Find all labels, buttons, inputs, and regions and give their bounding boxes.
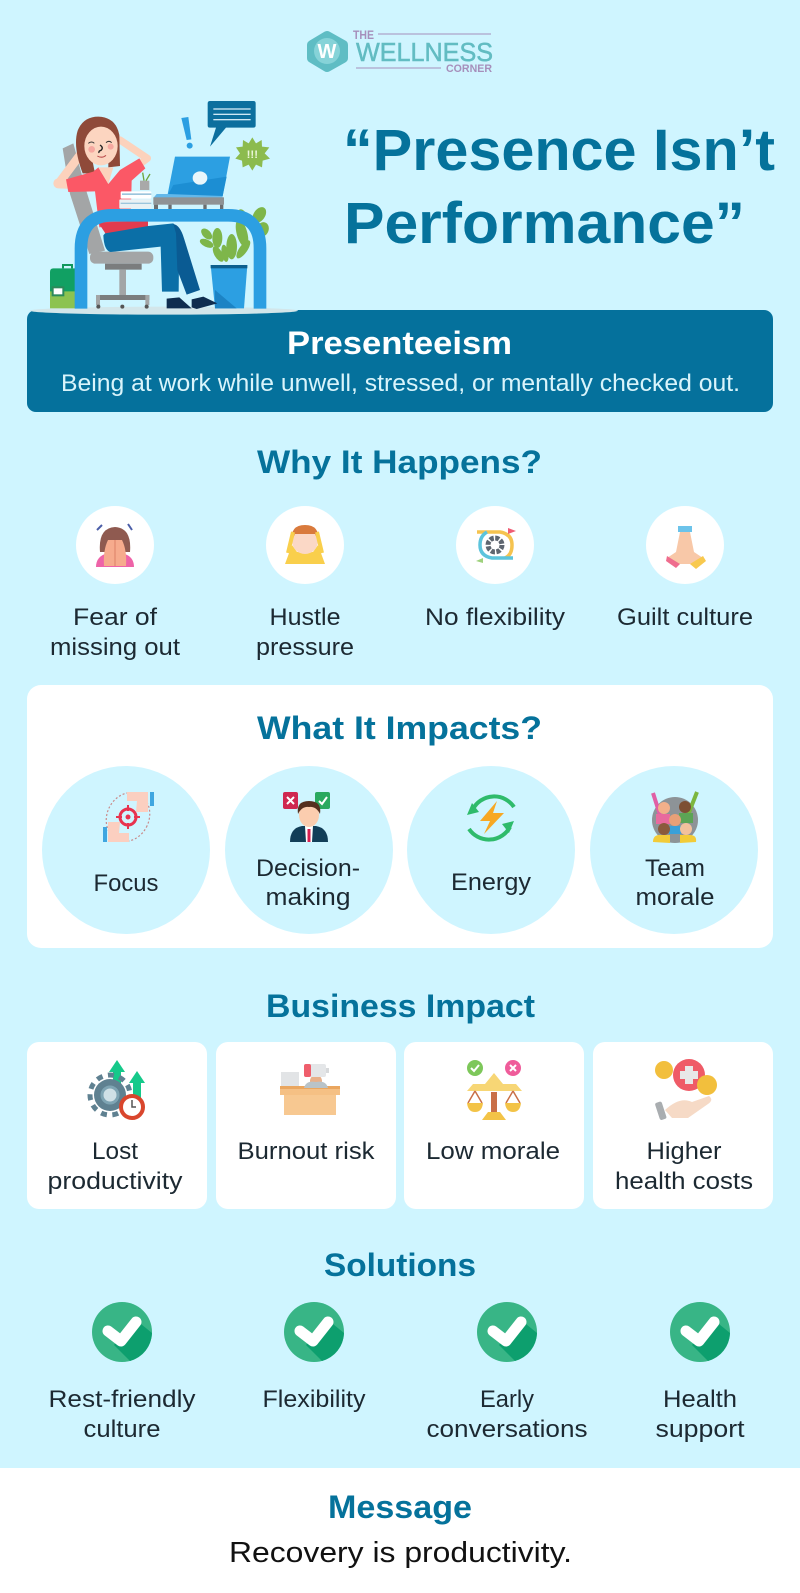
card: lost productivity <box>27 1042 207 1209</box>
item: guilt culture <box>617 506 753 631</box>
item: decision-making: Decision- <box>256 855 360 882</box>
item: guilt culture: Guilt culture <box>617 604 753 631</box>
illustration: woman relaxing at desk: !!! <box>247 149 258 161</box>
icon: balance scale <box>467 1060 522 1120</box>
icon: girl covering face <box>96 524 134 567</box>
item: rest-friendly culture <box>48 1302 195 1443</box>
heading: business impact: Business Impact <box>266 988 535 1024</box>
icon: check mark <box>670 1302 730 1362</box>
panel: message <box>0 1468 800 1593</box>
card: low morale: Low morale <box>426 1138 560 1165</box>
card: higher health costs: Higher <box>646 1138 722 1165</box>
banner: presenteeism definition: Presenteeism <box>287 325 512 361</box>
card: burnout risk <box>216 1042 396 1209</box>
icon: check mark <box>477 1302 537 1362</box>
item: early conversations: conversations <box>426 1416 588 1443</box>
icon: gear with clock and arrows <box>90 1060 145 1118</box>
item: decision-making: making <box>266 884 350 911</box>
icon: lightning with cycle arrows <box>467 796 514 840</box>
banner: presenteeism definition <box>27 310 773 412</box>
heading: why it happens: Why It Happens? <box>257 444 542 480</box>
item: team morale: morale <box>636 884 714 911</box>
item: health support <box>656 1302 745 1443</box>
logo: THE <box>353 28 374 42</box>
item: rest-friendly culture: Rest-friendly <box>48 1386 195 1413</box>
icon: hands framing target <box>98 785 158 849</box>
logo: W <box>318 41 337 63</box>
card: lost productivity: productivity <box>48 1168 182 1195</box>
item: hustle pressure: Hustle <box>270 604 340 631</box>
icon: person under pressure <box>285 525 325 564</box>
item: fear of missing out <box>50 506 180 661</box>
heading: solutions: Solutions <box>324 1247 476 1283</box>
icon: praying hands <box>666 526 706 569</box>
title: “Presence Isn’t <box>343 118 775 183</box>
item: flexibility: Flexibility <box>262 1386 366 1413</box>
item: early conversations <box>426 1302 588 1443</box>
logo: WELLNESS <box>356 37 493 67</box>
icon: check mark <box>284 1302 344 1362</box>
card: low morale <box>404 1042 584 1209</box>
icon: check mark <box>92 1302 152 1362</box>
icon: medical coins over hand <box>655 1059 717 1120</box>
illustration: woman relaxing at desk <box>30 101 298 315</box>
panel: what it impacts <box>27 685 773 948</box>
item: fear of missing out: Fear of <box>73 604 157 631</box>
logo <box>312 28 493 75</box>
item: focus: Focus <box>94 870 158 897</box>
item: hustle pressure: pressure <box>256 634 354 661</box>
logo: CORNER <box>446 63 492 75</box>
title: Performance” <box>344 191 745 256</box>
heading: what it impacts: What It Impacts? <box>257 710 542 746</box>
heading: message: Message <box>328 1489 472 1525</box>
card: higher health costs: health costs <box>615 1168 753 1195</box>
item: team morale <box>590 766 758 934</box>
card: higher health costs <box>593 1042 773 1209</box>
item: fear of missing out: missing out <box>50 634 180 661</box>
item: hustle pressure <box>256 506 354 661</box>
banner: presenteeism definition: Being at work while unwell, stressed, or mentally checked out. <box>61 370 740 397</box>
item: no flexibility: No flexibility <box>425 604 565 631</box>
icon: person with choices <box>283 792 330 842</box>
icon: cheering team <box>652 792 698 843</box>
icon: exhausted worker at desk <box>280 1064 340 1115</box>
item: health support: support <box>656 1416 745 1443</box>
item: health support: Health <box>663 1386 737 1413</box>
card: burnout risk: Burnout risk <box>238 1138 376 1165</box>
item: energy <box>407 766 575 934</box>
item: flexibility <box>262 1302 366 1413</box>
item: decision-making <box>225 766 393 934</box>
icon: gear with arrows <box>476 528 516 563</box>
card: lost productivity: Lost <box>92 1138 138 1165</box>
item: no flexibility <box>425 506 565 631</box>
item: energy: Energy <box>451 869 531 896</box>
text: recovery is productivity: Recovery is productivity. <box>229 1537 572 1569</box>
item: focus <box>42 766 210 934</box>
item: team morale: Team <box>645 855 705 882</box>
item: rest-friendly culture: culture <box>84 1416 160 1443</box>
title <box>343 118 775 256</box>
item: early conversations: Early <box>480 1386 534 1413</box>
